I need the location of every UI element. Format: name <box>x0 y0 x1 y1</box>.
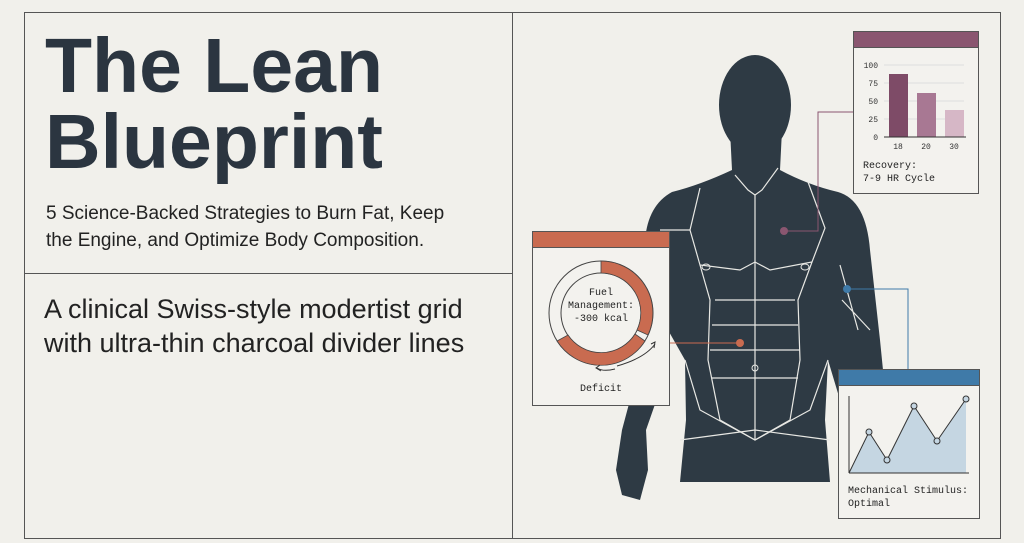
description: with ultra-thin charcoal divider lines <box>44 328 464 358</box>
text: recovery: Recovery: <box>863 161 917 172</box>
panel: fuel management: Management: <box>568 301 634 312</box>
text: stimulus: Optimal <box>848 499 890 510</box>
title <box>45 23 383 185</box>
line chart <box>848 396 970 474</box>
bar chart <box>864 62 966 152</box>
bar chart: 0 <box>873 134 878 143</box>
panel: fuel management <box>532 231 670 406</box>
connector: recovery <box>780 112 853 235</box>
bar chart: 100 <box>864 62 878 71</box>
text: stimulus <box>848 486 968 510</box>
panel: fuel management: Fuel <box>589 288 613 299</box>
description <box>44 294 464 358</box>
text: stimulus: Mechanical Stimulus: <box>848 486 968 497</box>
title: Blueprint <box>45 99 383 185</box>
description: A clinical Swiss-style modertist grid <box>44 294 463 324</box>
bar chart: 20 <box>921 143 931 152</box>
title: The Lean <box>45 23 383 109</box>
panel: recovery <box>853 31 979 194</box>
donut chart <box>548 260 656 372</box>
subtitle: 5 Science-Backed Strategies to Burn Fat, Keep <box>46 203 444 224</box>
panel: mechanical stimulus <box>838 369 980 519</box>
bar chart: 50 <box>868 98 878 107</box>
connector: stimulus <box>843 285 908 369</box>
subtitle: the Engine, and Optimize Body Composition. <box>46 230 424 251</box>
bar chart: 75 <box>868 80 878 89</box>
text: deficit: Deficit <box>580 384 622 395</box>
subtitle <box>46 203 444 251</box>
bar chart: 25 <box>868 116 878 125</box>
panel: fuel management: -300 kcal <box>574 314 628 325</box>
bar chart: 18 <box>893 143 903 152</box>
bar chart: 30 <box>949 143 959 152</box>
text: recovery <box>863 161 935 185</box>
connector: fuel <box>669 339 744 347</box>
text: recovery: 7-9 HR Cycle <box>863 174 935 185</box>
